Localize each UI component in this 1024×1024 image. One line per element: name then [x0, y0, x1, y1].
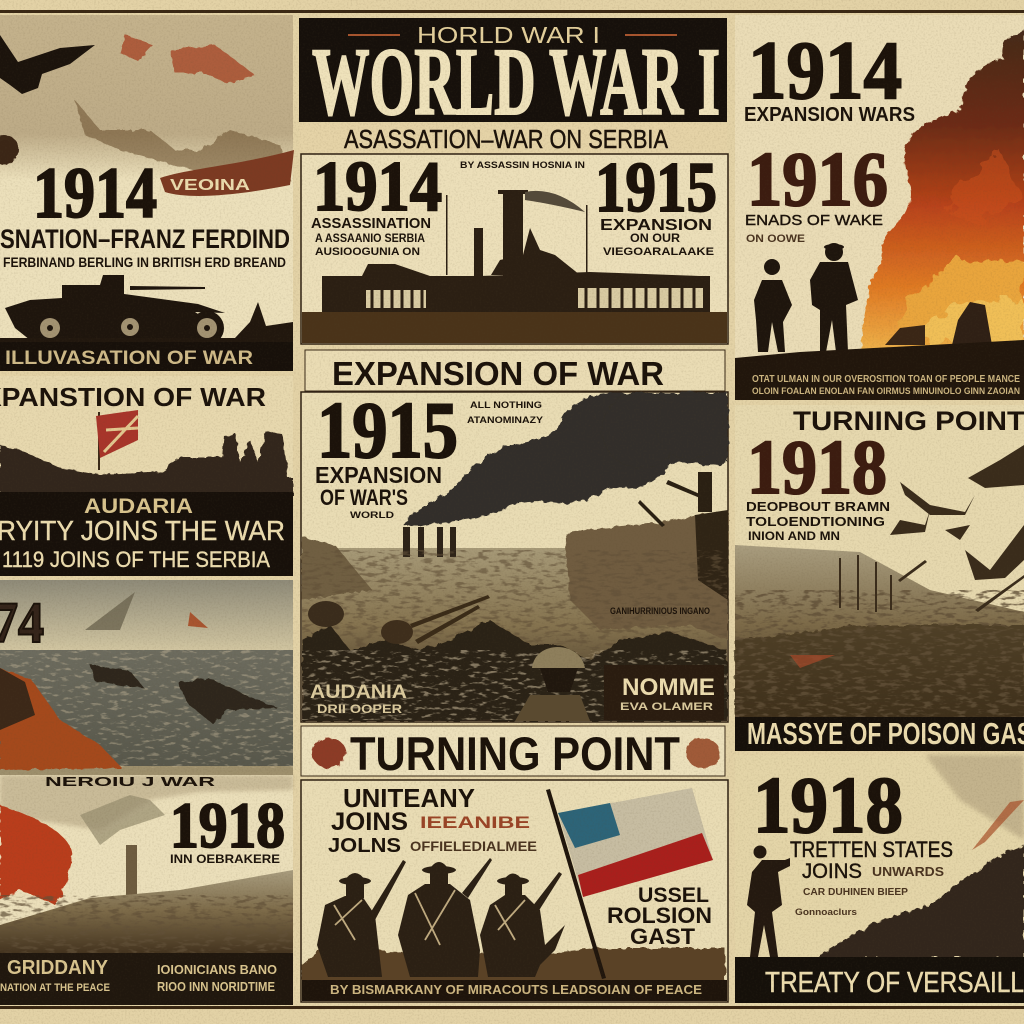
heading: expansion of war: EXPANSION OF WAR: [332, 355, 664, 392]
label: expansion wars: EXPANSION WARS: [744, 104, 915, 126]
fire plume: [0, 805, 73, 905]
tower: [126, 845, 137, 900]
panel: left 1914 assassination: [0, 15, 294, 345]
label: ends of wake: ENADS OF WAKE: [745, 212, 883, 229]
year: 1916: 1916: [747, 136, 888, 222]
red streak: [972, 800, 1024, 850]
panel: right 1918 treaty: [735, 755, 1024, 1005]
label: Gast: GAST: [630, 924, 696, 949]
small text right: IOIONICIANS BANO: [157, 962, 277, 977]
title block: [299, 18, 727, 135]
small text: INN OEBRAKERE: [170, 852, 280, 866]
label: of war: OF WAR'S: [320, 485, 408, 510]
small header second: ATANOMINAZY: [467, 415, 543, 425]
box: Somme: [604, 665, 724, 720]
label: expansion: EXPANSION: [600, 217, 712, 234]
year: 1914: 1914: [33, 153, 157, 233]
small note right: GANIHURRINIOUS INGANO: [610, 606, 710, 616]
icon: eagle: [0, 35, 95, 94]
soldiers silhouettes: [754, 243, 858, 352]
fire and smoke: [862, 30, 1024, 352]
wreck mound: [820, 845, 1024, 958]
ground band: [735, 340, 1024, 400]
small text: FERBINAND BERLING IN BRITISH ERD BREAND: [3, 254, 286, 270]
subtitle: ASASSATION–WAR ON SERBIA: [344, 124, 669, 154]
small header: BY ASSASSIN HOSNIA IN: [460, 160, 585, 170]
bottom band: [302, 980, 727, 1001]
text: Audaria: AUDARIA: [84, 495, 193, 518]
banner text: VEOINA: [170, 177, 251, 194]
text: Griddany: GRIDDANY: [7, 957, 109, 979]
straps: [334, 890, 525, 945]
label line: ON OUR: [630, 231, 680, 245]
year: 1918: 1918: [170, 790, 285, 862]
band: left caption: ILLUVASATION OF WAR: [5, 348, 253, 369]
decoration: map ridge: [75, 100, 290, 180]
year: 1914: 1914: [313, 148, 442, 226]
label: Rolsion: ROLSION: [607, 903, 712, 928]
bottom text: BY BISMARKANY OF MIRACOUTS LEADSOIAN OF PEACE: [330, 982, 702, 997]
text line 3: INION AND MN: [748, 529, 840, 543]
panel: right top fire: [735, 15, 1024, 400]
panel: 1915 battlefield: [301, 387, 728, 722]
shield fragment: [0, 135, 19, 165]
label: assassination: ASSASSINATION: [311, 215, 431, 232]
heading: expansion of war: [305, 350, 725, 392]
heading: turning point: [301, 726, 725, 780]
icon: left emblem: [312, 738, 346, 768]
label: expansion: EXPANSION: [315, 462, 442, 488]
panel: turning point soldiers: [301, 780, 728, 1002]
text: garbled red: IEEANIBE: [420, 813, 530, 832]
text line 2: TOLOENDTIONING: [746, 514, 885, 529]
icon: right emblem: [686, 738, 720, 768]
year: 1918: 1918: [753, 760, 903, 850]
bottom band: [0, 953, 293, 1005]
fire on coast: [0, 668, 122, 770]
panel: expansion of war left: [0, 376, 293, 576]
ground: [302, 312, 727, 343]
year: 1918: 1918: [747, 424, 887, 510]
text line 1: DEOPBOUT BRAMN: [746, 499, 890, 514]
text: joins the war: RYITY JOINS THE WAR: [0, 515, 285, 546]
label: Ussel: USSEL: [638, 884, 709, 907]
heading: TURNING POINT: [793, 406, 1024, 436]
label line: VIEGOARALAAKE: [603, 246, 714, 258]
red accents: [790, 655, 835, 668]
label line: AUSIOOGUNIA ON: [315, 246, 420, 258]
map fragment: [80, 795, 165, 845]
small header: ALL NOTHING: [470, 400, 542, 410]
landscape: [0, 870, 293, 960]
soldiers and landscape silhouette: [0, 432, 293, 495]
label second: ON OOWE: [746, 233, 805, 245]
overline: HORLD WAR I: [417, 22, 600, 48]
label second: DRII OOPER: [317, 702, 402, 716]
icon: vintage truck: [5, 275, 225, 345]
text: joins second: JOLNS: [328, 835, 401, 857]
text: joins: JOINS: [331, 808, 408, 836]
year: 1914: 1914: [748, 24, 902, 116]
aircraft: [890, 445, 1024, 612]
small text right second: RIOO INN NORIDTIME: [157, 979, 275, 994]
label line: A ASSAANIO SERBIA: [315, 231, 425, 245]
ground: [0, 302, 293, 345]
battlefield: [735, 545, 1024, 719]
chimneys: [403, 527, 456, 557]
year: 1915: 1915: [317, 387, 458, 475]
text: joins: JOINS: [802, 860, 862, 883]
text: joins of the serbia: 1119 JOINS OF THE SERBIA: [2, 547, 270, 572]
text: unwards: UNWARDS: [872, 864, 944, 879]
icon: factory: [322, 190, 710, 312]
decoration: red map motif: [120, 35, 255, 83]
label second: EVA OLAMER: [620, 701, 713, 713]
heading: assassination: SNATION–FRANZ FERDIND: [0, 224, 290, 254]
banner: red ribbon: [160, 150, 294, 196]
ground: [302, 548, 727, 721]
main title: WORLD WAR I: [312, 28, 720, 135]
treaty band: [735, 957, 1024, 1003]
icon: flag: [96, 410, 138, 470]
window slats: [366, 288, 703, 308]
crowd of soldiers: [302, 595, 727, 721]
icon: flag: [546, 788, 713, 979]
small line: CAR DUHINEN BIEEP: [803, 887, 908, 898]
band: left caption: [0, 342, 293, 371]
panel: right turning point 1918: [735, 405, 1024, 719]
label: Audania: AUDANIA: [310, 682, 407, 703]
soldier silhouette: [747, 846, 790, 957]
panel: 1914 1915 factory: [301, 148, 728, 344]
panel: left 1918: [0, 774, 293, 1005]
label: Somme: NOMME: [622, 674, 715, 701]
dark band: [0, 492, 293, 576]
caption: NEROIU J WAR: [45, 774, 216, 789]
ground grass: [302, 948, 725, 982]
fort and ship: [565, 472, 728, 640]
small note: WORLD: [350, 510, 395, 520]
small text left: NATION AT THE PEACE: [0, 982, 110, 994]
text: united: UNITEANY: [343, 783, 475, 813]
heading text: TURNING POINT: [350, 727, 680, 780]
year: 1915: 1915: [595, 149, 717, 227]
text: united states: TRETTEN STATES: [790, 837, 953, 862]
smoke plume: [403, 391, 728, 527]
small line: Gonnoaclurs: [795, 907, 857, 917]
smokestacks: [839, 555, 892, 612]
text: garbled: OFFIELEDIALMEE: [410, 838, 537, 854]
panel: naval sea scene: [0, 580, 293, 778]
soldiers: [317, 858, 565, 977]
